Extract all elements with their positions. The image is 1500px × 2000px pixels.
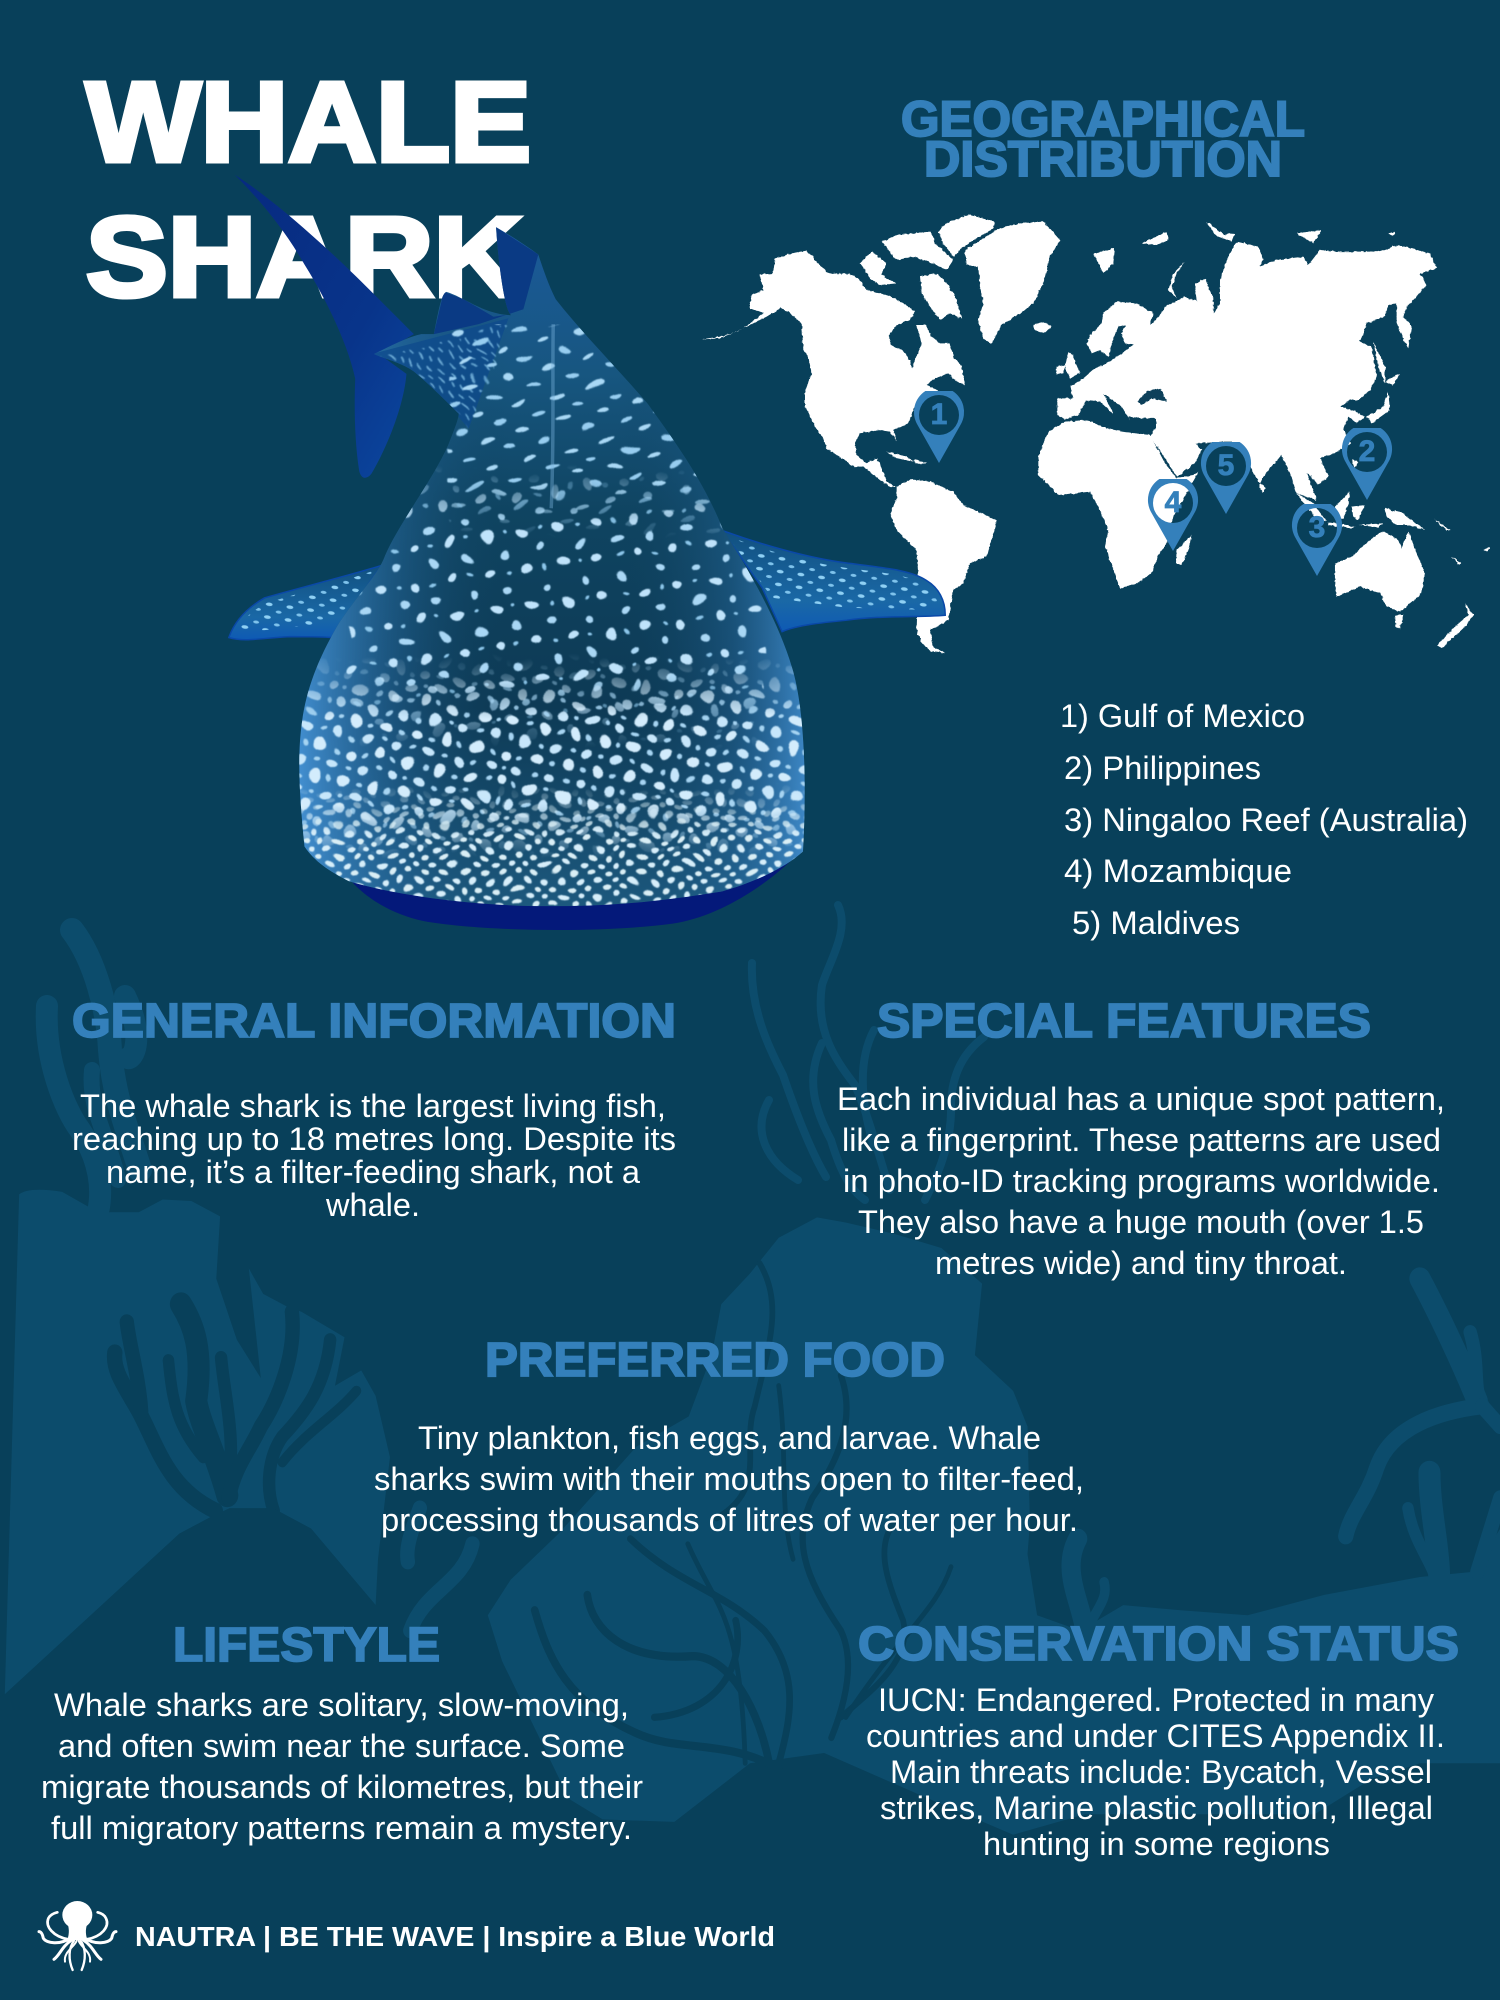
map pin 2: 2 xyxy=(1359,435,1375,468)
icon: octopus logo xyxy=(39,1901,116,1970)
title: WHALE xyxy=(86,59,531,185)
left rock with coral tree xyxy=(0,1190,390,1814)
footer tagline: NAUTRA | BE THE WAVE | Inspire a Blue World xyxy=(135,1921,775,1952)
location list: 3) Ningaloo Reef (Australia) xyxy=(1064,802,1468,838)
section: lifestyle: migrate thousands of kilometres, but their xyxy=(41,1769,643,1805)
section: conservation status: strikes, Marine plastic pollution, Illegal xyxy=(880,1790,1433,1826)
section: lifestyle xyxy=(41,1619,643,1846)
section: lifestyle: full migratory patterns remain a mystery. xyxy=(51,1810,632,1846)
section: special features: like a fingerprint. These patterns are used xyxy=(842,1122,1441,1158)
section: special features: in photo-ID tracking programs worldwide. xyxy=(843,1163,1440,1199)
section: general information: whale. xyxy=(325,1187,420,1223)
whale shark illustration xyxy=(229,175,945,930)
location list: 5) Maldives xyxy=(1072,905,1240,941)
section: general information: GENERAL INFORMATION xyxy=(72,995,676,1048)
map pin 2 xyxy=(1342,428,1392,500)
section: preferred food: processing thousands of litres of water per hour. xyxy=(381,1502,1078,1538)
right pectoral fin xyxy=(722,531,945,632)
section: lifestyle: LIFESTYLE xyxy=(173,1619,440,1672)
section: general information: name, it’s a filter-feeding shark, not a xyxy=(106,1154,640,1190)
map pin 3 xyxy=(1292,504,1342,576)
map pin 4: 4 xyxy=(1165,486,1182,519)
map pin 5: 5 xyxy=(1218,449,1234,482)
map pin 1 xyxy=(914,391,964,463)
eurasia africa and oceania xyxy=(1038,222,1489,648)
background coral silhouettes xyxy=(0,905,1500,1835)
map pin 5 xyxy=(1201,442,1251,514)
location list: 4) Mozambique xyxy=(1064,853,1292,889)
left pectoral fin xyxy=(229,565,382,640)
heading: geographical distribution xyxy=(901,91,1305,187)
mouth underside xyxy=(349,849,803,930)
heading: geographical distribution: DISTRIBUTION xyxy=(924,131,1282,187)
section: general information xyxy=(72,995,676,1223)
tail fin xyxy=(235,175,414,478)
section: preferred food: Tiny plankton, fish eggs, and larvae. Whale xyxy=(418,1420,1041,1456)
shark body with spots xyxy=(290,220,817,916)
section: preferred food: PREFERRED FOOD xyxy=(485,1334,945,1387)
section: special features: metres wide) and tiny throat. xyxy=(935,1245,1347,1281)
map pin 4 xyxy=(1148,479,1198,551)
section: conservation status: hunting in some regions xyxy=(983,1826,1330,1862)
right coral branches xyxy=(1071,1279,1500,1631)
section: general information: The whale shark is the largest living fish, xyxy=(80,1088,666,1124)
section: preferred food: sharks swim with their mouths open to filter-feed, xyxy=(374,1461,1084,1497)
section: lifestyle: and often swim near the surface. Some xyxy=(58,1728,625,1764)
section: general information: reaching up to 18 metres long. Despite its xyxy=(72,1121,676,1157)
section: special features: SPECIAL FEATURES xyxy=(877,995,1371,1048)
title: SHARK xyxy=(86,194,522,320)
location list: 2) Philippines xyxy=(1064,750,1261,786)
section: conservation status: countries and under CITES Appendix II. xyxy=(866,1718,1445,1754)
section: conservation status: Main threats include: Bycatch, Vessel xyxy=(890,1754,1432,1790)
section: conservation status: CONSERVATION STATUS xyxy=(858,1618,1459,1671)
location list: 1) Gulf of Mexico xyxy=(1060,698,1305,734)
upper kelp strands xyxy=(752,905,984,1200)
location list xyxy=(1060,698,1468,941)
world map xyxy=(702,215,1489,653)
title xyxy=(86,59,531,320)
section: special features: They also have a huge mouth (over 1.5 xyxy=(858,1204,1424,1240)
americas and greenland xyxy=(702,215,1060,653)
section: preferred food xyxy=(374,1334,1084,1538)
map pin 3: 3 xyxy=(1309,511,1325,544)
heading: geographical distribution: GEOGRAPHICAL xyxy=(901,91,1305,147)
map pin 1: 1 xyxy=(931,398,947,431)
section: lifestyle: Whale sharks are solitary, slow-moving, xyxy=(54,1687,629,1723)
upper left kelp xyxy=(47,930,140,1212)
section: conservation status: IUCN: Endangered. Protected in many xyxy=(878,1682,1434,1718)
section: special features: Each individual has a unique spot pattern, xyxy=(837,1081,1445,1117)
central dome and seabed xyxy=(407,1217,1500,1835)
section: special features xyxy=(837,995,1445,1281)
section: conservation status xyxy=(858,1618,1459,1862)
